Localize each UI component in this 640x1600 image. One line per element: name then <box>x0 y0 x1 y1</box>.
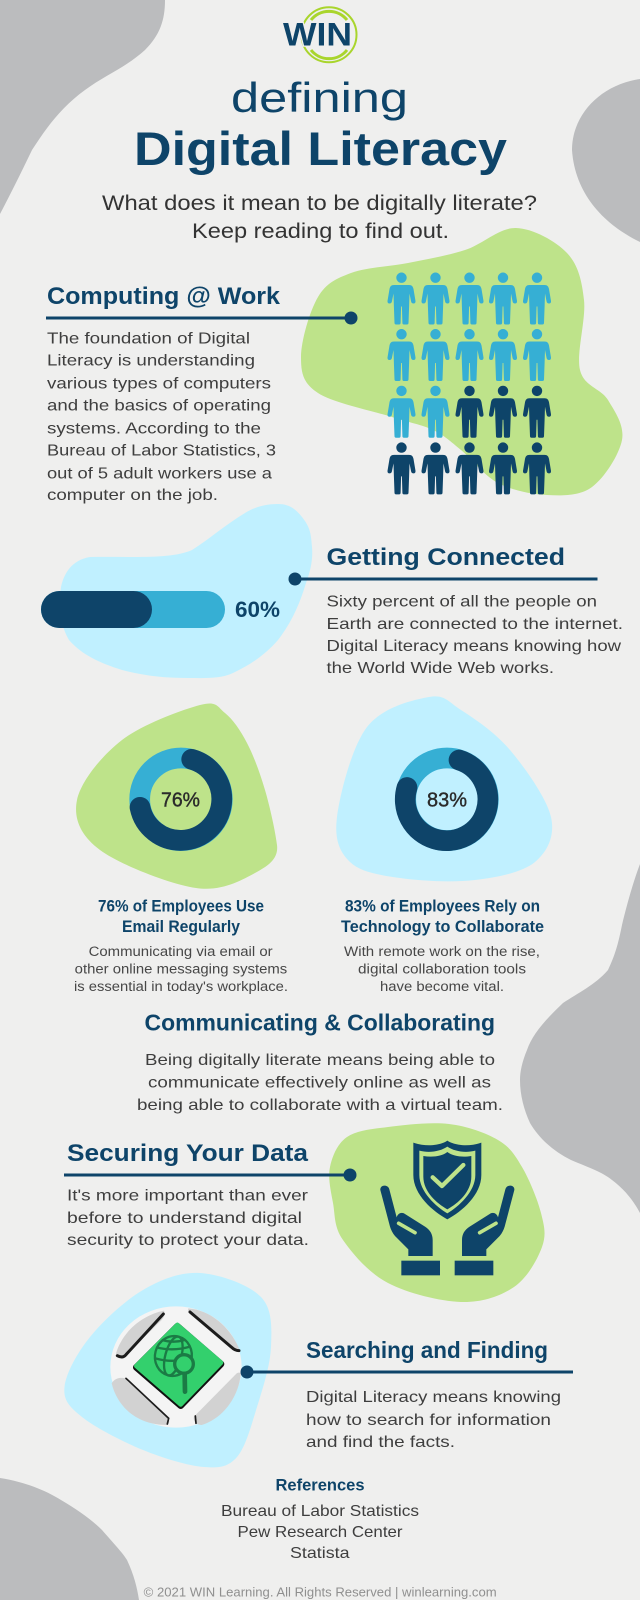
body text: various types of computers <box>47 375 271 392</box>
progress bar: 60% <box>41 591 280 628</box>
background blob: top right <box>572 79 640 242</box>
background blob: bottom left <box>0 1478 139 1600</box>
caption text: Communicating via email or <box>89 944 273 959</box>
connector line <box>288 572 598 586</box>
donut chart: 83%: 83% <box>427 790 467 812</box>
panel: computing at work <box>46 228 622 504</box>
body text: security to protect your data. <box>67 1232 309 1249</box>
body text: the World Wide Web works. <box>326 660 554 677</box>
panel: email stat <box>74 703 288 994</box>
logo: WIN <box>283 7 356 62</box>
body text: and find the facts. <box>306 1434 455 1451</box>
body text <box>47 330 276 504</box>
subtitle: Keep reading to find out. <box>192 220 449 243</box>
caption heading <box>341 898 544 936</box>
body text: systems. According to the <box>47 420 261 437</box>
icon: keyboard search key <box>110 1306 242 1428</box>
body text: out of 5 adult workers use a <box>47 465 272 482</box>
caption heading: 76% of Employees Use <box>98 898 264 916</box>
body text: and the basics of operating <box>47 398 271 415</box>
connector line <box>240 1366 573 1378</box>
caption text: With remote work on the rise, <box>344 944 540 959</box>
body text <box>67 1188 309 1249</box>
body text: being able to collaborate with a virtual team. <box>137 1097 503 1114</box>
body text: Digital Literacy means knowing how <box>326 638 622 655</box>
donut chart: 76% <box>140 758 222 841</box>
caption heading: Email Regularly <box>122 918 241 936</box>
subtitle: What does it mean to be digitally literate? <box>102 192 537 215</box>
connector line <box>46 312 358 324</box>
caption text <box>344 944 540 994</box>
pictogram: 3 of 5 workers <box>387 272 551 494</box>
heading: Communicating & Collaborating <box>144 1010 495 1036</box>
caption text: is essential in today's workplace. <box>74 979 288 994</box>
references <box>221 1476 419 1562</box>
subtitle <box>102 192 537 243</box>
donut chart: 83% <box>405 758 488 841</box>
references: References <box>276 1476 364 1495</box>
body text <box>137 1052 503 1114</box>
caption text: digital collaboration tools <box>358 962 526 976</box>
body text <box>306 1389 561 1451</box>
background blob: top left <box>0 0 165 214</box>
panel: getting connected <box>41 504 623 678</box>
body text: The foundation of Digital <box>47 330 250 347</box>
panel: securing your data <box>64 1123 545 1302</box>
donut chart: 76%: 76% <box>161 790 200 812</box>
connector line <box>64 1168 356 1182</box>
heading: Searching and Finding: Searching and Finding <box>306 1337 548 1363</box>
panel: collaboration stat <box>336 696 552 994</box>
body text: Bureau of Labor Statistics, 3 <box>47 443 276 460</box>
body text: Literacy is understanding <box>47 353 255 370</box>
body text: Sixty percent of all the people on <box>326 594 597 611</box>
footer: © 2021 WIN Learning. All Rights Reserved | winlearning.com <box>144 1584 497 1600</box>
panel: searching and finding <box>64 1273 573 1467</box>
background blob: right middle <box>520 864 640 1213</box>
heading: Computing @ Work: Computing @ Work <box>47 283 281 310</box>
heading: Securing Your Data: Securing Your Data <box>67 1140 309 1167</box>
title <box>134 74 507 175</box>
caption text <box>74 944 288 994</box>
body text: communicate effectively online as well as <box>148 1074 491 1092</box>
body text: how to search for information <box>306 1412 551 1429</box>
references: Pew Research Center <box>238 1524 403 1541</box>
body text: before to understand digital <box>67 1210 302 1227</box>
heading: Getting Connected: Getting Connected <box>326 544 565 571</box>
section: communicating and collaborating <box>137 1010 503 1114</box>
references: Statista <box>290 1545 350 1562</box>
icon: shield in hands <box>380 1141 514 1275</box>
caption heading: 83% of Employees Rely on <box>345 898 540 916</box>
body text: Earth are connected to the internet. <box>326 616 623 633</box>
caption heading <box>98 898 264 936</box>
title: Digital Literacy <box>134 122 507 175</box>
caption text: have become vital. <box>380 979 504 994</box>
body text: computer on the job. <box>47 487 218 504</box>
body text: Being digitally literate means being able to <box>145 1052 495 1069</box>
body text: It's more important than ever <box>67 1188 309 1205</box>
title: defining <box>231 74 408 121</box>
caption text: other online messaging systems <box>75 962 287 976</box>
body text: Digital Literacy means knowing <box>306 1389 561 1406</box>
logo: WIN: WIN <box>283 16 352 52</box>
references: Bureau of Labor Statistics <box>221 1503 419 1520</box>
caption heading: Technology to Collaborate <box>341 918 544 936</box>
progress bar: 60%: 60% <box>235 597 280 622</box>
body text <box>326 594 623 677</box>
